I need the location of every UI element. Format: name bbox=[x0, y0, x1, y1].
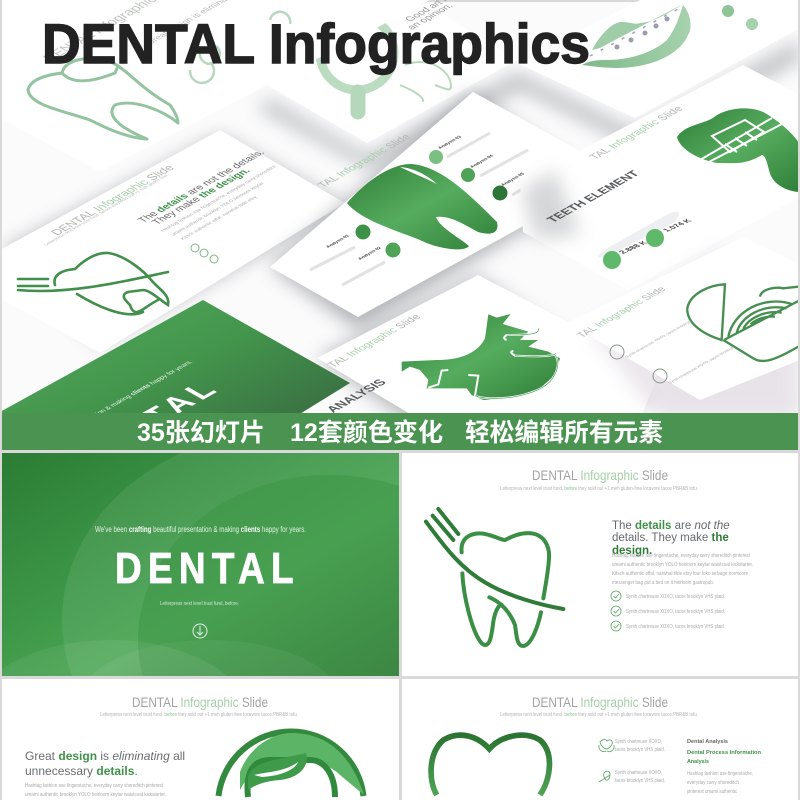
slide: green title cover bbox=[2, 300, 350, 413]
slide: details with brush tooth: They make the design. bbox=[150, 167, 253, 226]
body text: umami authentic brooklyn YOLO heirloom keytar waistcoat kickstarter. bbox=[612, 562, 753, 568]
slide: tooth outline bbox=[2, 0, 430, 140]
check list: Synth chartreuse XOXO, tacos brooklyn VHS plaid. bbox=[626, 609, 725, 615]
icon: hands with tooth bbox=[599, 740, 614, 752]
banner: 12套颜色变化 bbox=[290, 419, 443, 447]
banner: 35张幻灯片 bbox=[137, 419, 265, 447]
slide: noodle bowl outline: Synth chartreuse XOXO, tacos brooklyn bbox=[624, 319, 693, 358]
check list: Synth chartreuse XOXO, tacos brooklyn VHS plaid. bbox=[626, 594, 725, 600]
slide: teeth element: TEETH ELEMENT bbox=[543, 168, 643, 224]
body text: Hashtag fashion axe fingerstache, everyday carry shoreditch pinterest bbox=[612, 553, 751, 559]
panel: details slide bbox=[402, 453, 798, 676]
slide: green title cover: DENTAL bbox=[64, 375, 228, 468]
slide: details with brush tooth: The details are not the details. bbox=[136, 149, 268, 224]
analysis text: Dental Analysis bbox=[687, 739, 728, 745]
analysis text bbox=[687, 739, 761, 795]
feature text: Synth chartreuse XOXO, bbox=[615, 770, 662, 776]
analysis text: Hashtag fashion axe fingerstache, bbox=[687, 771, 753, 777]
analysis text: everyday carry shoreditch bbox=[687, 780, 739, 786]
feature text: tacos brooklyn VHS plaid. bbox=[615, 778, 665, 784]
slide: teeth element: TAL Infographic Slide bbox=[587, 105, 686, 161]
slide: big green tooth: Analysis 03 bbox=[437, 135, 463, 149]
body text: messenger bag put a bird on it heirloom gastropub. bbox=[612, 580, 714, 586]
slide: green title cover: We've been crafting beautiful presentation & making clients happy for years. bbox=[0, 359, 195, 471]
body text: Kitsch authentic offal, narwhal tilde etsy four loko selvage normcore bbox=[612, 571, 748, 577]
slide: big green tooth bbox=[270, 92, 578, 317]
analysis text: pinterest umami authentic bbox=[687, 789, 737, 795]
slide: analysis splash: TAL Infographic Slide bbox=[325, 313, 424, 369]
slide: big green tooth: Analysis 05 bbox=[500, 172, 526, 186]
banner bbox=[2, 413, 798, 450]
heading: details: design. bbox=[612, 545, 652, 557]
slide: analysis splash bbox=[317, 275, 660, 420]
icon: down arrow circle bbox=[193, 624, 207, 638]
heading: great design: Great design is eliminating all bbox=[25, 749, 185, 763]
slide: teeth element: 2.888 K bbox=[617, 240, 650, 255]
slide: magnifier bbox=[267, 0, 517, 143]
slide: analysis splash: ANALYSIS bbox=[323, 377, 390, 414]
slide: details with brush tooth: Letterpress next level trust fund, before they sold out +1 meh gluten-free bbox=[43, 173, 169, 246]
panel: design slide bbox=[2, 679, 399, 800]
slide: details with brush tooth bbox=[0, 130, 345, 353]
panel: design slide: Letterpress next level trust fund, before they sold out +1 meh gluten-free locavore tacos PBR&B tofu. bbox=[100, 712, 298, 718]
panel: analysis slide bbox=[402, 679, 798, 800]
check list bbox=[611, 591, 725, 631]
analysis text: Dental Process Information bbox=[687, 750, 761, 756]
banner: 轻松编辑所有元素 bbox=[465, 419, 663, 447]
icon: tooth with brush bbox=[599, 771, 610, 782]
slide: big green tooth: Analysis 02 bbox=[357, 246, 383, 260]
slide: teeth element bbox=[520, 65, 800, 290]
heading: details: The details are not the bbox=[612, 520, 730, 532]
slide: noodle bowl outline: Synth chartreuse XOXO, tacos brooklyn bbox=[667, 345, 736, 384]
check list: Synth chartreuse XOXO, tacos brooklyn VHS plaid. bbox=[626, 624, 725, 630]
slide: details with brush tooth: DENTAL Infographic Slide bbox=[48, 163, 178, 237]
icon: tooth in circle bbox=[218, 732, 364, 797]
feature text: Synth chartreuse XOXO, bbox=[615, 739, 662, 745]
icon: heart tooth bbox=[431, 735, 549, 795]
heading: great design: unnecessary details. bbox=[25, 764, 138, 778]
body text: umami authentic brooklyn YOLO heirloom keytar waistcoat kickstarter. bbox=[25, 792, 166, 798]
panel: green cover slide: Letterpress next level trust fund, before. bbox=[160, 601, 239, 607]
panel: details slide: Letterpress next level trust fund, before they sold out +1 meh gluten-free locavore tacos PBR&B tofu. bbox=[500, 486, 698, 492]
slide: details with brush tooth: Kitsch authentic offal, narwhal tilde etsy bbox=[180, 195, 259, 241]
analysis text: Analysis bbox=[687, 759, 709, 765]
panel: green cover slide: DENTAL bbox=[115, 543, 300, 593]
slide: teeth element: 1.074 K bbox=[661, 218, 694, 233]
slide: lips with braces bbox=[517, 0, 800, 118]
body text: Hashtag fashion axe fingerstache, everyday carry shoreditch pinterest bbox=[25, 783, 164, 789]
panel: green cover slide: We've been crafting beautiful presentation & making clients happy for years. bbox=[95, 525, 306, 534]
slide: big green tooth: Analysis 04 bbox=[469, 154, 495, 168]
panel: analysis slide: Letterpress next level trust fund, before they sold out +1 meh gluten-free locavore tacos PBR&B tofu. bbox=[500, 712, 698, 718]
slide: big green tooth: TAL Infographic Slide bbox=[315, 133, 414, 189]
slide: noodle bowl outline bbox=[567, 237, 800, 400]
slide: noodle bowl outline: TAL Infographic Slide bbox=[575, 285, 669, 339]
heading: details: details. They make the bbox=[612, 532, 729, 544]
icon: tooth with toothbrush bbox=[426, 509, 563, 646]
panel: green cover slide bbox=[2, 453, 399, 676]
title: DENTAL Infographics bbox=[42, 12, 590, 75]
panel: design slide: DENTAL Infographic Slide bbox=[132, 694, 268, 710]
slide: details with brush tooth: umami authentic brooklyn YOLO heirloom keytar bbox=[170, 181, 266, 237]
panel: analysis slide: DENTAL Infographic Slide bbox=[532, 694, 668, 710]
panel: details slide: DENTAL Infographic Slide bbox=[532, 467, 668, 483]
body text bbox=[25, 783, 166, 798]
feature text bbox=[615, 739, 665, 784]
slide: details with brush tooth: Hashtag fashion axe fingerstache, everyday carry shoreditch bbox=[160, 164, 279, 233]
body text bbox=[612, 553, 753, 586]
slide: big green tooth: Analysis 01 bbox=[325, 234, 351, 248]
slide: magnifier: an opinion. bbox=[405, 2, 456, 31]
isometric slide collage bbox=[2, 0, 798, 413]
feature text: tacos brooklyn VHS plaid. bbox=[615, 747, 665, 753]
